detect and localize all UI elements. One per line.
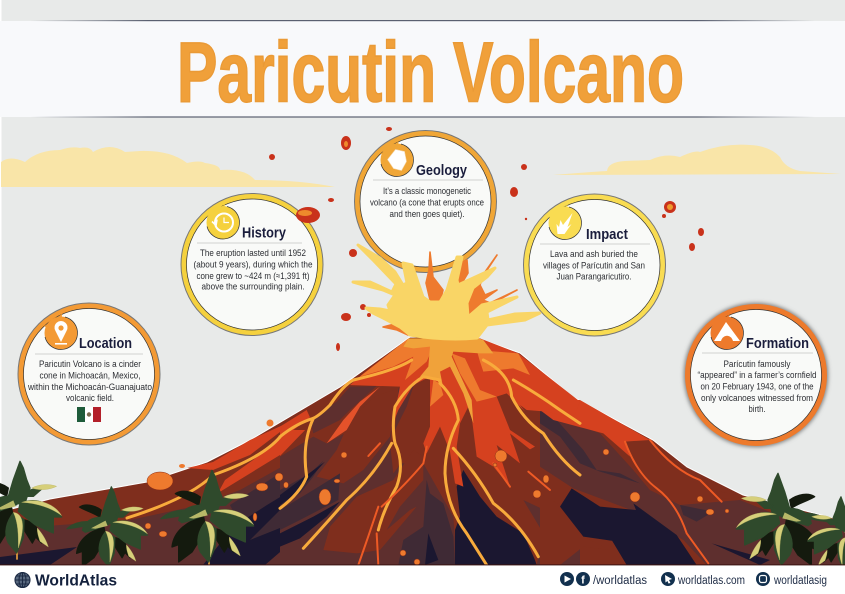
icon: mountain — [714, 322, 740, 341]
panel: location: Paricutin Volcano is a cinder — [39, 359, 142, 370]
right streams — [625, 440, 722, 563]
brand name: WorldAtlas — [35, 573, 117, 590]
panel: geology: and then goes quiet). — [390, 209, 464, 220]
panel: geology — [354, 130, 496, 272]
panel: formation: only volcanoes witnessed from — [701, 393, 813, 404]
panel: history — [181, 194, 323, 336]
panel: formation: birth. — [748, 404, 766, 415]
yellow splash — [353, 245, 540, 339]
panel: geology: volcano (a cone that erupts once — [370, 198, 484, 208]
cloud right — [553, 145, 841, 175]
panel: impact — [524, 194, 666, 336]
left stream continuation — [127, 437, 280, 518]
icon: facebook — [576, 572, 590, 586]
panel: geology: Geology — [416, 163, 467, 179]
footer — [0, 564, 845, 594]
icon: palm tree 2 — [67, 487, 148, 572]
panel: history: History — [242, 226, 286, 242]
right flank layers — [540, 400, 845, 565]
panel: location: within the Michoacán-Guanajuato — [27, 382, 152, 393]
icon: video — [560, 572, 574, 586]
panel: location: cone in Michoacán, Mexico, — [40, 370, 140, 382]
volcano — [0, 337, 845, 565]
panel: formation: Formation — [746, 336, 809, 352]
icon: burst — [556, 213, 572, 234]
panel: impact: Juan Parangaricutiro. — [556, 272, 632, 282]
icon: palm tree 1 — [0, 461, 62, 560]
icon: facebook: f — [581, 574, 585, 586]
facebook handle: /worldatlas — [593, 575, 647, 587]
instagram handle: worldatlasig — [773, 575, 827, 587]
icon: palm tree 4 — [736, 473, 829, 572]
title band — [0, 20, 845, 118]
panel: history: (about 9 years), during which the — [194, 260, 312, 270]
panel: location: volcanic field. — [66, 393, 114, 404]
panel: formation — [684, 303, 828, 447]
light orange crater rim — [403, 338, 493, 423]
website: worldatlas.com — [677, 575, 745, 587]
icon: globe — [15, 572, 30, 588]
lava splash — [353, 245, 540, 339]
panel: location: Location — [79, 336, 132, 352]
icon: palm tree 5 — [808, 497, 845, 575]
red lava upper cone — [280, 338, 580, 487]
orange splash behind — [383, 252, 517, 335]
centre flank layers — [280, 380, 580, 565]
icon: cursor — [661, 572, 675, 586]
panel: geology: It’s a classic monogenetic — [383, 186, 471, 197]
icon: instagram — [756, 572, 770, 586]
panel: impact: villages of Parícutin and San — [543, 260, 645, 272]
panel: impact: Lava and ash buried the — [550, 249, 638, 260]
panel: impact: Impact — [586, 227, 628, 243]
left red slope band — [187, 425, 305, 493]
lava streams — [280, 360, 580, 565]
red-orange streams — [358, 443, 550, 565]
icon: palm tree 3 — [161, 470, 254, 569]
panel: formation: on 20 February 1943, one of the — [700, 382, 814, 392]
left flank shading — [0, 462, 337, 565]
panel: location — [18, 303, 160, 445]
cloud left — [1, 147, 335, 187]
icon: rock — [388, 150, 406, 170]
icon: mexican flag — [77, 407, 101, 422]
icon: map pin — [54, 321, 68, 345]
panel: formation: “appeared” in a farmer’s cornfield — [698, 370, 816, 381]
panel: history: The eruption lasted until 1952 — [200, 248, 306, 259]
panel: history: above the surrounding plain. — [202, 282, 304, 292]
volcano silhouette — [0, 337, 845, 565]
orange cone bands — [360, 338, 530, 407]
lava blobs — [145, 449, 729, 565]
flying lava bits — [179, 127, 704, 468]
icon: clock — [212, 214, 233, 232]
panel: history: cone grew to ~424 m (≈1,391 ft) — [196, 271, 310, 282]
panel: formation: Parícutin famously — [724, 359, 791, 370]
lava bomb on history ring — [296, 207, 320, 223]
